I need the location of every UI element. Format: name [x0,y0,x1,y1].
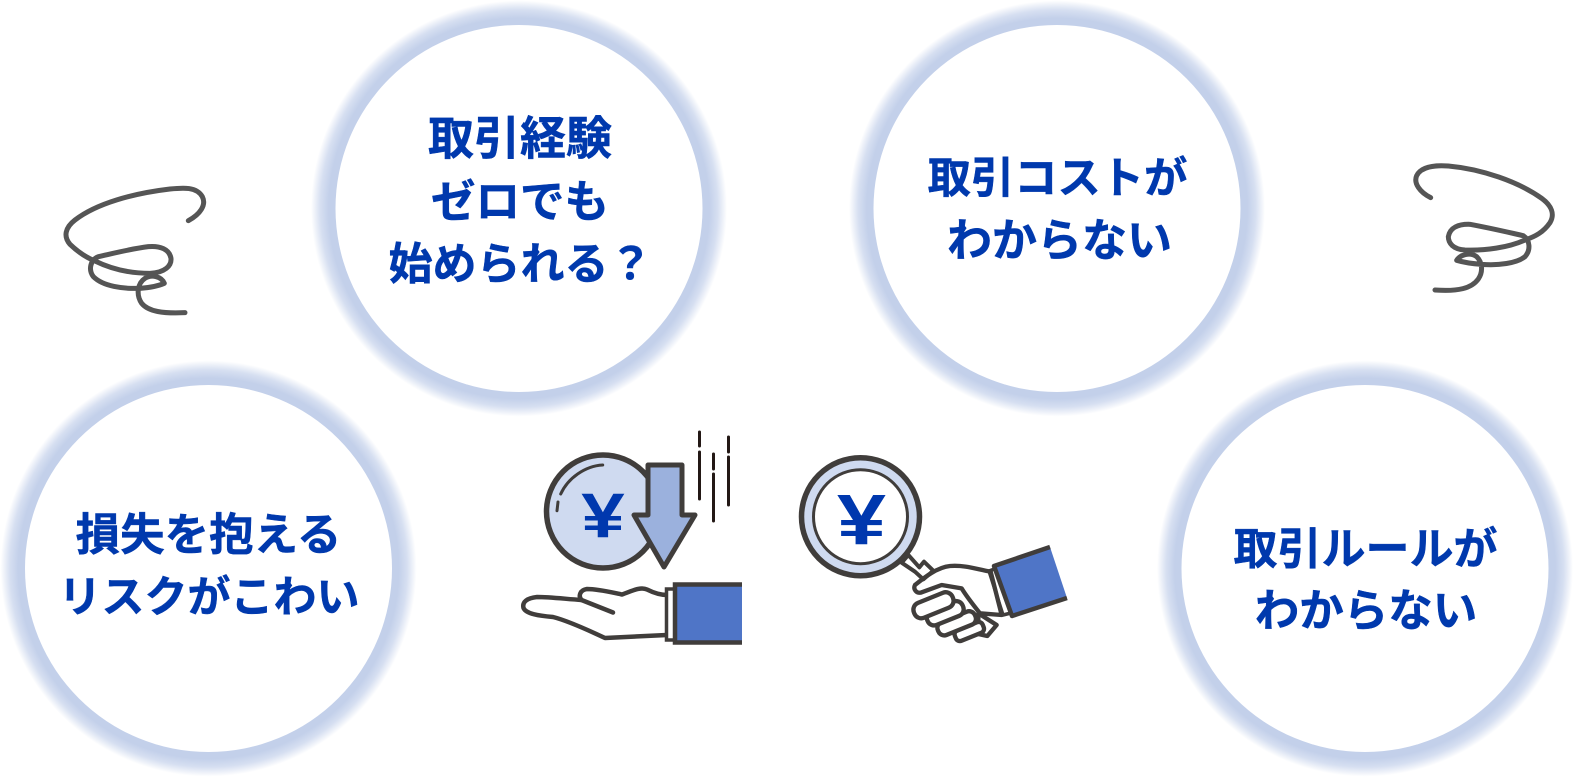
text: 損失を抱えるリスクがこわい: 損失を抱える [76,511,341,560]
handle [902,555,933,579]
little finger [953,621,985,642]
index finger [911,590,956,620]
text: 損失を抱えるリスクがこわい: リスクがこわい [58,574,360,622]
text: 取引経験ゼロでも始められる: ゼロでも [431,178,609,227]
back of fingers [978,613,997,636]
text: 取引ルールがわからない: わからない [1255,587,1477,636]
icon: falling yen coin and open hand [523,432,742,643]
icon: left squiggle [66,188,204,313]
ring finger [935,609,978,637]
sleeve [994,547,1067,616]
palm and thumb [914,566,1002,615]
motion lines [700,432,728,521]
panel: 損失を抱えるリスクがこわい [0,360,416,776]
yen sign: ¥ [581,481,625,552]
sleeve [675,584,742,643]
open hand [523,588,667,638]
middle finger [925,599,966,628]
down arrow [634,465,695,567]
panel: 取引ルールがわからない [1157,360,1573,776]
text: 取引経験ゼロでも始められる: 始められる？ [388,240,652,289]
text: 取引ルールがわからない: 取引ルールが [1234,525,1498,574]
text: 取引コストがわからない: 取引コストが [928,155,1187,203]
panel: 取引コストがわからない [849,0,1265,416]
yen sign: ¥ [837,480,887,559]
cuff [666,589,675,640]
text: 取引経験ゼロでも始められる: 取引経験 [428,112,612,164]
hand gripping the handle [902,555,1002,642]
panel: 取引経験ゼロでも始められる [311,0,727,416]
cuff [989,568,1011,615]
icon: magnifying glass with yen and hand [802,458,1067,642]
lens [802,458,920,576]
text: 取引コストがわからない: わからない [947,215,1172,266]
coin [546,455,660,568]
icon: right squiggle [1416,166,1552,290]
